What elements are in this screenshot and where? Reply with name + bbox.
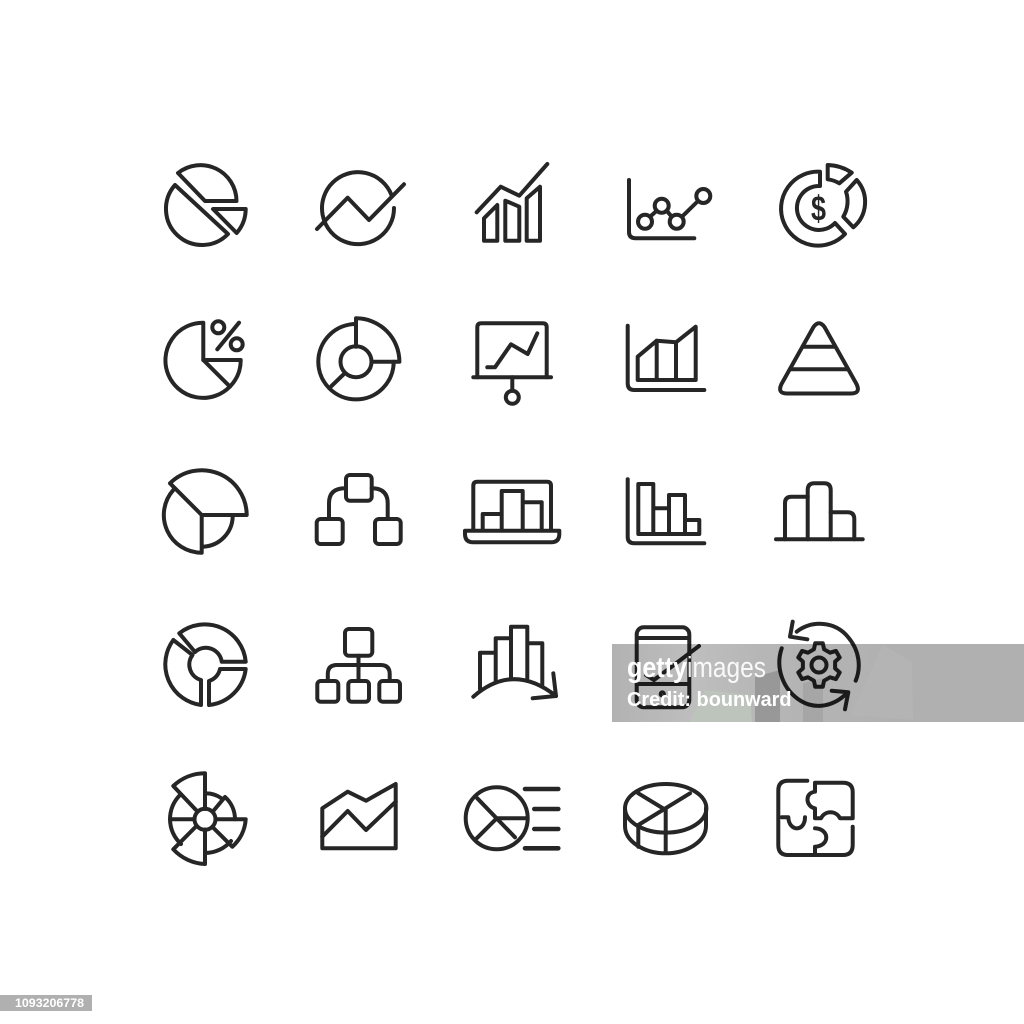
watermark banner (612, 644, 1024, 722)
icon: dollar donut chart (781, 165, 865, 246)
icon: segmented donut chart (165, 624, 246, 705)
image id tag (0, 995, 92, 1011)
watermark: brand text: getty (627, 652, 687, 684)
icon: layered area chart (322, 784, 396, 848)
icon: exploded pie chart (166, 165, 246, 245)
icon: laptop with bars (465, 482, 559, 542)
icon: radial blade chart (170, 773, 246, 864)
icon: donut chart with raised segment (318, 318, 399, 399)
watermark: brand text: images (687, 652, 766, 684)
icon: flow diagram (317, 475, 401, 544)
icon: circle with trend line (317, 172, 404, 244)
icon: pie chart with raised sector (164, 470, 247, 553)
icon: pie chart with percent (165, 321, 243, 398)
watermark: brand text (627, 652, 766, 684)
icon: 3D pie chart (625, 784, 706, 853)
icon: hierarchy chart (317, 629, 400, 702)
icon: puzzle pieces (778, 781, 853, 855)
icon: rounded bar chart (776, 483, 863, 539)
icon: tablet with check mark (637, 627, 699, 707)
icon: descending bar chart (628, 479, 704, 543)
image id tag: 1093206778 (15, 996, 84, 1010)
icon: pyramid (780, 323, 858, 394)
icon: bars with curved arrow (473, 627, 556, 698)
watermark: credit text: Credit: bounward (627, 689, 792, 711)
icon: gear with refresh arrows (779, 622, 859, 709)
icon: presentation board (473, 323, 551, 404)
icon grid (164, 164, 865, 864)
icon: area bar chart (628, 326, 704, 390)
icon: dot line chart (629, 180, 710, 238)
icon: rising bars with trend line (477, 164, 547, 241)
icon: pie chart with legend lines (466, 787, 558, 849)
icon: dollar donut chart: $ (811, 190, 826, 228)
